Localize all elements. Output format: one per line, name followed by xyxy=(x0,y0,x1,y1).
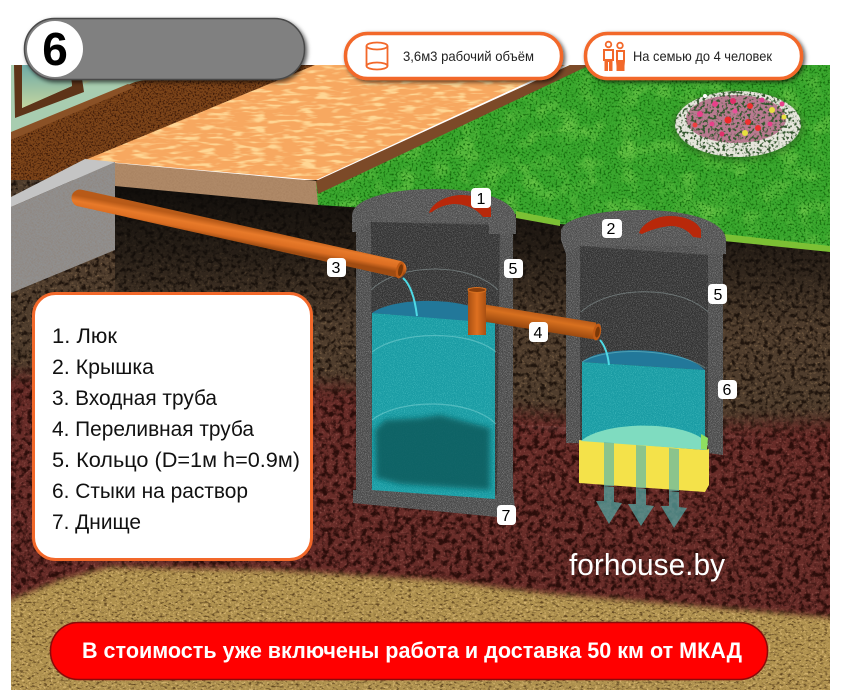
number badge 6: 6 xyxy=(723,382,732,399)
tank 1 interior xyxy=(371,222,500,495)
banner: delivery included xyxy=(50,622,768,680)
tank 2 interior xyxy=(580,246,708,445)
banner text: В стоимость уже включены работа и доставка 50 км от МКАД xyxy=(82,638,742,663)
dark top of soil xyxy=(115,185,830,330)
number badge 1: 1 xyxy=(477,191,486,208)
tank 2 xyxy=(561,210,726,528)
legend item 5: 5. Кольцо (D=1м h=0.9м) xyxy=(52,449,300,472)
lawn xyxy=(300,65,830,251)
number badge 3 xyxy=(327,258,346,277)
family text: На семью до 4 человек xyxy=(633,48,773,64)
panel: legend xyxy=(34,294,312,560)
tank 1 sludge xyxy=(375,415,490,490)
paved path xyxy=(85,65,590,205)
number badge 7 xyxy=(497,505,516,525)
grass fringe xyxy=(516,211,830,252)
number badge 5 tank 2: 5 xyxy=(714,287,723,304)
legend item 3: 3. Входная труба xyxy=(52,387,217,410)
title pill xyxy=(24,18,304,80)
concrete foundation xyxy=(11,159,115,293)
hatch 2 xyxy=(639,216,701,238)
legend item 7: 7. Днище xyxy=(52,511,141,534)
number badge 4: 4 xyxy=(534,325,543,342)
icon: people xyxy=(603,42,625,71)
filter top xyxy=(581,426,708,450)
badge: family xyxy=(586,34,802,78)
tank 1 water surface xyxy=(372,301,495,323)
forhouse watermark: forhouse.by xyxy=(569,547,725,582)
sand layer xyxy=(11,555,830,690)
volume text: 3,6м3 рабочий объём xyxy=(403,48,534,64)
number badge 2: 2 xyxy=(607,221,616,238)
tank 2 water xyxy=(582,362,705,450)
tank 1 top cap xyxy=(352,189,516,234)
hatch 1 xyxy=(429,195,491,217)
section number: 6 xyxy=(42,23,68,75)
red clay layer xyxy=(11,365,830,622)
number badge 1 xyxy=(471,188,491,208)
tank 2 outer wall xyxy=(566,235,723,455)
seepage arrows xyxy=(604,442,679,491)
legend item 6: 6. Стыки на раствор xyxy=(52,480,248,503)
number badge 3: 3 xyxy=(332,260,341,277)
tank 2 water surface xyxy=(582,350,705,370)
pipe 3 xyxy=(80,198,406,279)
water stream 2 xyxy=(600,340,609,365)
legend item 1: 1. Люк xyxy=(52,325,118,348)
number badge 2 xyxy=(602,219,622,238)
number badge 6 xyxy=(718,380,737,399)
number badge 5 tank 1: 5 xyxy=(509,261,518,278)
number badge 4 xyxy=(529,322,548,342)
tank 1 ring lines xyxy=(371,269,498,290)
legend item 4: 4. Переливная труба xyxy=(52,418,254,441)
legend item 2: 2. Крышка xyxy=(52,356,154,379)
tank 1 water xyxy=(372,313,495,499)
tank 1 outer wall xyxy=(353,210,516,517)
badge: volume xyxy=(346,34,562,78)
house wall with window xyxy=(11,65,315,180)
water stream 1 xyxy=(403,278,417,316)
icon: cylinder xyxy=(366,42,388,70)
tank 2 top cap xyxy=(561,210,726,254)
upper soil layer xyxy=(11,180,830,440)
filter sand block xyxy=(579,440,709,492)
flower bed xyxy=(672,91,804,161)
number badge 7: 7 xyxy=(502,508,511,525)
number badge 5 tank 2 xyxy=(708,284,727,304)
pipe 4 xyxy=(468,288,602,341)
number badge 5 tank 1 xyxy=(504,259,523,278)
tank 1 xyxy=(352,189,516,517)
